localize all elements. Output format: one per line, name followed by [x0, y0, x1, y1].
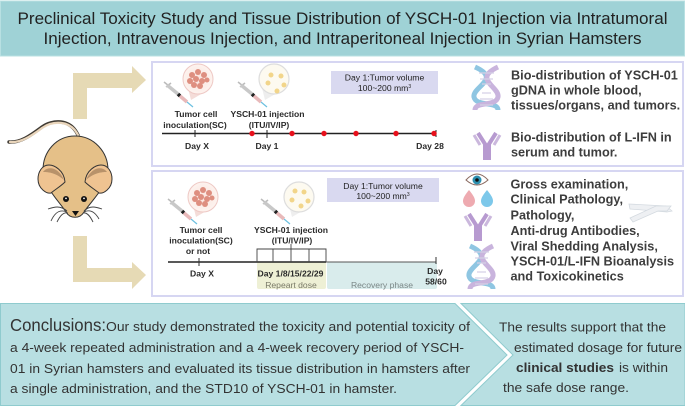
band: repeat dose: Repeart dose [265, 280, 317, 290]
icon: blood and water drops [463, 190, 493, 207]
label: tumor cell inoculation: inoculation(SC) [169, 236, 233, 246]
text: conclusions: Conclusions: [10, 315, 106, 335]
timeline: single dose: Day 28 [416, 141, 444, 151]
text: conclusions: a 4-week repeated administration and a 4-week recovery period of YSCH- [10, 340, 464, 355]
text: endpoints: Clinical Pathology, [510, 192, 623, 206]
panel: single-dose study [152, 62, 683, 166]
title: Preclinical Toxicity Study and Tissue Distribution of YSCH-01 Injection via Intratumoral [18, 9, 668, 28]
callout: tumor volume: Day 1:Tumor volume [345, 72, 424, 82]
timeline: single dose [162, 130, 444, 151]
label: injection: (ITU/IV/IP) [249, 120, 289, 130]
icon: YSCH-01 injection [261, 182, 314, 224]
arrow: to repeat-dose panel [73, 236, 146, 289]
text: endpoints: YSCH-01/L-IFN Bioanalysis [510, 254, 674, 268]
text: L-IFN bio-distribution: serum and tumor. [511, 146, 617, 160]
panel: repeat-dose study [152, 171, 683, 296]
text: endpoints: Anti-drug Antibodies, [510, 224, 640, 238]
text: L-IFN bio-distribution: Bio-distribution of L-IFN in [511, 130, 672, 144]
icon: antibody [474, 133, 500, 160]
timeline: repeat dose: Day X [190, 268, 214, 278]
icon: hamster [9, 122, 112, 222]
timeline: repeat dose: 58/60 [425, 276, 447, 286]
callout: tumor volume [327, 178, 439, 202]
timeline: single dose: Day 1 [256, 141, 279, 151]
icon: DNA [474, 67, 498, 110]
band: recovery phase: Recovery phase [351, 280, 413, 290]
label: injection: YSCH-01 injection [254, 225, 328, 235]
text: conclusions: Our study demonstrated the toxicity and potential toxicity of [106, 319, 470, 334]
panel: results [461, 304, 685, 406]
callout: tumor volume: 100~200 mm [356, 191, 407, 201]
text: endpoints: Gross examination, [510, 178, 628, 192]
callout: tumor volume: Day 1:Tumor volume [343, 181, 423, 191]
band: repeat dose [257, 262, 326, 290]
icon: YSCH-01 injection [238, 64, 289, 107]
icon: DNA [469, 246, 493, 289]
text: gDNA bio-distribution: gDNA in whole blood, [511, 84, 642, 98]
label: injection: (ITU/IV/IP) [272, 236, 312, 246]
band: recovery phase [327, 262, 437, 290]
text: results: the safe dose range. [503, 380, 629, 395]
timeline: single dose: Day X [185, 141, 209, 151]
text: results: clinical studies [516, 360, 614, 375]
timeline: repeat dose: Day 1/8/15/22/29 [258, 268, 324, 278]
icon: scissors [629, 204, 672, 222]
text: endpoints: and Toxicokinetics [510, 270, 624, 284]
icon: tumor cell injection [168, 182, 218, 224]
text: results: estimated dosage for future [514, 340, 682, 355]
text: endpoints: Viral Shedding Analysis, [510, 240, 658, 254]
label: injection: YSCH-01 injection [230, 109, 305, 119]
label: tumor cell inoculation: Tumor cell [180, 225, 222, 235]
label: tumor cell inoculation: inoculation(SC) [163, 120, 227, 130]
timeline: repeat dose: Day [427, 266, 443, 276]
panel: conclusions [0, 304, 507, 406]
text: conclusions: a single administration, and the STD10 of YSCH-01 in hamster. [10, 381, 397, 396]
title [0, 1, 684, 56]
title: Injection, Intravenous Injection, and Intraperitoneal Injection in Syrian Hamsters [44, 29, 642, 48]
text: results: The results support that the [499, 320, 666, 334]
icon: antibody [465, 214, 491, 241]
text: results: is within [619, 360, 668, 375]
icon: tumor cell injection [164, 64, 213, 107]
callout: tumor volume: 3 [407, 192, 410, 198]
text: gDNA bio-distribution: tissues/organs, and tumors. [511, 98, 680, 112]
callout: tumor volume [331, 71, 438, 94]
label: tumor cell inoculation: Tumor cell [175, 109, 217, 119]
icon: eye [466, 174, 488, 185]
label: tumor cell inoculation: or not [186, 246, 210, 256]
text: endpoints: Pathology, [510, 208, 574, 222]
arrow: to single-dose panel [73, 66, 146, 119]
timeline: repeat dose [168, 244, 447, 286]
text: gDNA bio-distribution: Bio-distribution of YSCH-01 [511, 68, 678, 82]
callout: tumor volume: 3 [408, 84, 411, 90]
callout: tumor volume: 100~200 mm [358, 83, 408, 93]
text: conclusions: 01 in Syrian hamsters and evaluated its tissue distribution in hamsters after [10, 361, 471, 376]
